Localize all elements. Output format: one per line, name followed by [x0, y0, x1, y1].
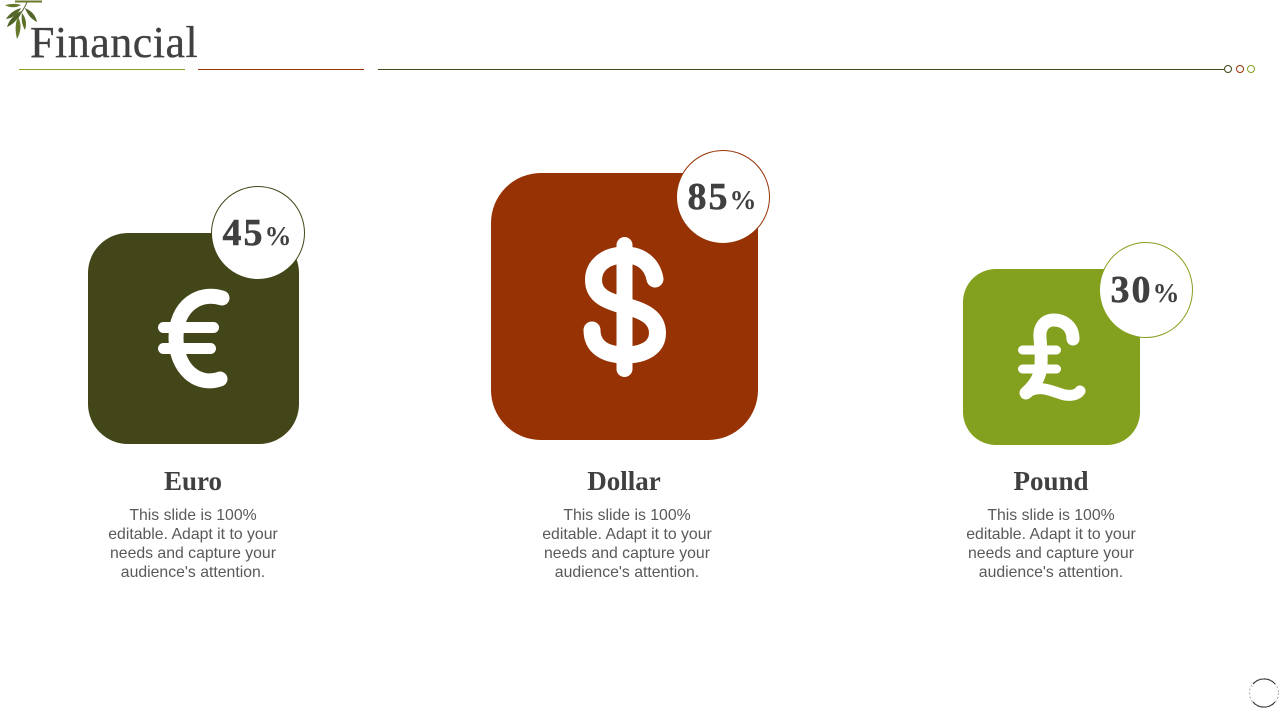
percent badge: 85% [676, 150, 770, 244]
panel: Dollar [491, 150, 770, 581]
text: Pound description: editable. Adapt it to your [966, 526, 1136, 543]
text: Dollar description: This slide is 100% [563, 507, 691, 524]
heading: Euro: Euro [164, 466, 222, 496]
percent badge: 45% [211, 186, 305, 280]
value: 30%: 30% [1110, 269, 1180, 311]
text: Dollar description: needs and capture your [544, 545, 710, 562]
panel: Euro [88, 186, 305, 581]
text: Pound description: needs and capture your [968, 545, 1134, 562]
icon: corner circle [1249, 678, 1279, 708]
value: 85%: 85% [688, 176, 756, 218]
icon: dollar sign [584, 237, 666, 377]
header rule with dots [19, 65, 1255, 73]
text: Pound description: audience's attention. [979, 564, 1123, 581]
rounded square: Pound [963, 269, 1140, 445]
text: Euro description: audience's attention. [121, 564, 265, 581]
percent badge: 30% [1099, 242, 1193, 338]
value: 45%: 45% [222, 212, 292, 254]
rounded square: Dollar [491, 173, 758, 440]
heading: Pound: Pound [1013, 466, 1089, 496]
icon: euro sign [158, 288, 230, 388]
text: Euro description: needs and capture your [110, 545, 276, 562]
panel: Pound [963, 242, 1193, 581]
text: Euro description [108, 507, 278, 581]
heading: Dollar: Dollar [587, 466, 661, 496]
title: Financial [30, 18, 198, 67]
text: Dollar description: audience's attention. [555, 564, 699, 581]
text: Dollar description [542, 507, 712, 581]
rounded square: Euro [88, 233, 299, 444]
text: Euro description: editable. Adapt it to your [108, 526, 278, 543]
text: Pound description [966, 507, 1136, 581]
text: Pound description: This slide is 100% [987, 507, 1115, 524]
icon: pound sign [1018, 314, 1086, 401]
text: Euro description: This slide is 100% [129, 507, 257, 524]
text: Dollar description: editable. Adapt it to your [542, 526, 712, 543]
icon: leaf branch [5, 0, 42, 39]
